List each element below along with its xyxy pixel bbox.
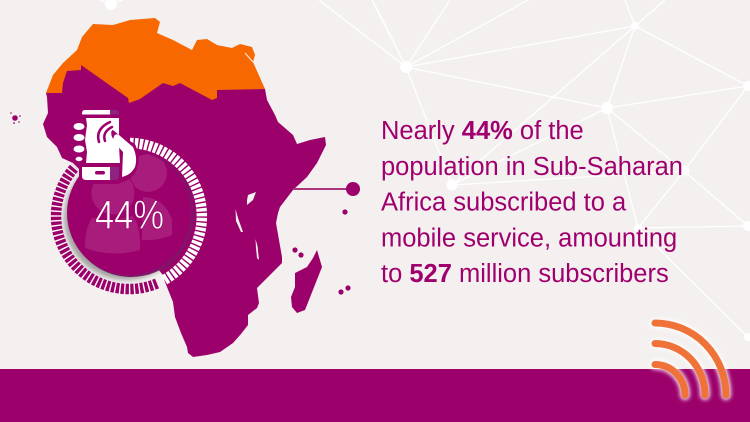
fingers xyxy=(74,123,84,161)
people silhouettes xyxy=(85,154,172,254)
disc shadow xyxy=(64,156,188,280)
north Africa region xyxy=(46,18,265,103)
phone top bar xyxy=(82,110,110,114)
statement text xyxy=(381,117,690,288)
red sea notch xyxy=(245,53,253,62)
phone bottom bar xyxy=(82,167,110,180)
progress ring xyxy=(56,143,202,289)
gauge: 44 percent xyxy=(56,143,202,289)
disc xyxy=(68,151,194,277)
callout line and dot xyxy=(293,182,360,196)
thumb and palm xyxy=(113,134,136,177)
statement text: mobile service, amounting xyxy=(381,224,677,252)
madagascar xyxy=(291,250,322,313)
signal arcs xyxy=(98,122,112,142)
map of Africa xyxy=(10,18,351,357)
background network pattern xyxy=(100,0,750,341)
phone outline xyxy=(79,107,122,184)
home button xyxy=(95,171,105,174)
statement text: to 527 million subscribers xyxy=(381,260,669,288)
bottom banner xyxy=(0,369,750,422)
icon: wifi signal arcs xyxy=(655,323,726,395)
icon: hand holding phone xyxy=(74,107,138,184)
statement text: Africa subscribed to a xyxy=(381,188,627,216)
statement text: Nearly 44% of the xyxy=(381,117,584,145)
sub-Saharan Africa region xyxy=(43,50,326,357)
lakes xyxy=(236,192,259,260)
percentage value: 44% xyxy=(95,192,164,238)
islands xyxy=(10,112,351,295)
statement text: population in Sub-Saharan xyxy=(381,153,683,181)
phone screen xyxy=(85,118,120,163)
